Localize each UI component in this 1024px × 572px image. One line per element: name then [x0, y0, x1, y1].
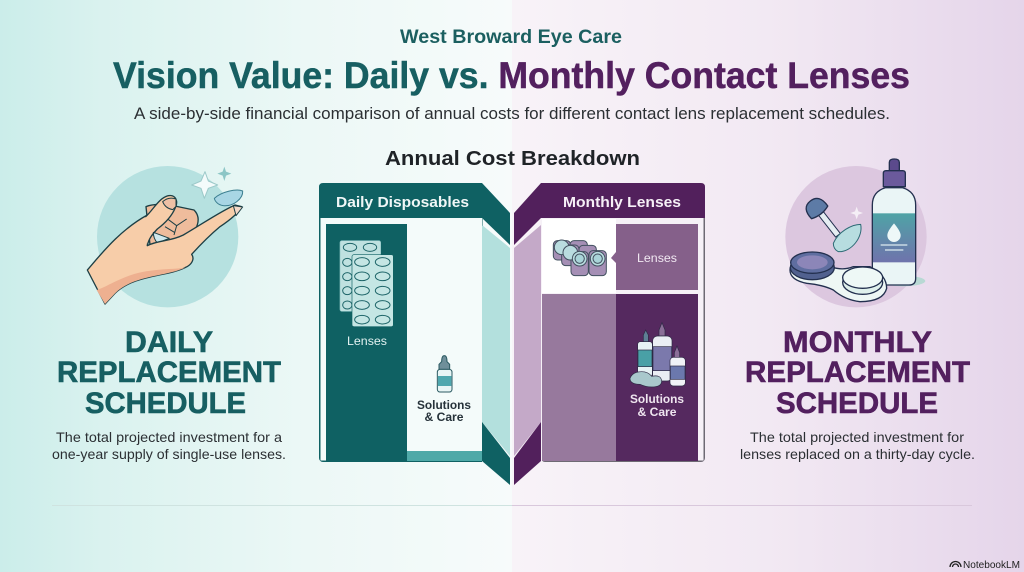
- fold: light purple side: [514, 225, 541, 456]
- fold: bottom: [482, 422, 510, 485]
- fold: light teal side: [482, 225, 510, 456]
- header organisation name: West Broward Eye Care: [400, 27, 622, 48]
- background: right half: [512, 0, 1024, 572]
- icon: contact lens care kit: [785, 159, 927, 307]
- title: Vision Value: Daily vs. Monthly Contact Lenses: [113, 55, 910, 96]
- white lens area: [542, 219, 616, 293]
- panel: daily disposables: [319, 183, 510, 485]
- icon: hand holding contact lens: [87, 166, 243, 307]
- text: monthly description: [740, 429, 975, 462]
- column: daily lenses cost: [326, 224, 407, 462]
- text: monthly description: The total projected investment for: [750, 429, 964, 445]
- heading: monthly replacement schedule: SCHEDULE: [776, 387, 938, 420]
- text: monthly description: lenses replaced on a thirty-day cycle.: [740, 446, 975, 462]
- text: daily description: The total projected investment for a: [56, 429, 282, 445]
- label: daily disposables: Daily Disposables: [336, 194, 469, 211]
- heading: daily replacement schedule: [57, 326, 281, 420]
- heading: monthly replacement schedule: REPLACEMENT: [745, 356, 970, 389]
- label: monthly lenses: Monthly Lenses: [563, 194, 681, 211]
- subtitle: A side-by-side financial comparison of annual costs for different contact lens replacement schedules.: [134, 104, 890, 123]
- strip: daily solutions cost: [407, 451, 482, 461]
- watermark: NotebookLM: NotebookLM: [963, 560, 1020, 571]
- label: monthly solutions and care: & Care: [638, 407, 676, 419]
- label: daily solutions and care: Solutions: [417, 400, 471, 412]
- icon: monthly lens cases: [553, 240, 606, 276]
- label: daily solutions and care: & Care: [424, 412, 464, 424]
- label: monthly solutions and care: Solutions: [630, 394, 684, 406]
- column: monthly solutions cost: [616, 294, 698, 461]
- panel: monthly lenses: [514, 183, 705, 485]
- background: left half: [0, 0, 512, 572]
- column: monthly left block: [542, 294, 616, 461]
- text: daily description: [52, 429, 286, 462]
- chart heading: Annual Cost Breakdown: [385, 148, 640, 170]
- fold: bottom: [514, 422, 541, 485]
- icon: small solution bottle: [437, 356, 452, 392]
- label: monthly solutions and care: [630, 394, 684, 419]
- icon: solution bottles and case: [630, 323, 685, 387]
- block: monthly lenses cost: [616, 224, 698, 290]
- heading: daily replacement schedule: REPLACEMENT: [57, 356, 281, 389]
- icon: blister packs: [340, 241, 393, 327]
- heading: daily replacement schedule: DAILY: [125, 326, 213, 359]
- label: monthly lenses block: Lenses: [637, 253, 677, 265]
- text: daily description: one-year supply of single-use lenses.: [52, 446, 286, 462]
- heading: monthly replacement schedule: [745, 326, 970, 420]
- heading: monthly replacement schedule: MONTHLY: [783, 326, 932, 359]
- heading: daily replacement schedule: SCHEDULE: [85, 387, 246, 420]
- label: daily solutions and care: [417, 400, 471, 424]
- label: daily lenses: Lenses: [347, 336, 387, 348]
